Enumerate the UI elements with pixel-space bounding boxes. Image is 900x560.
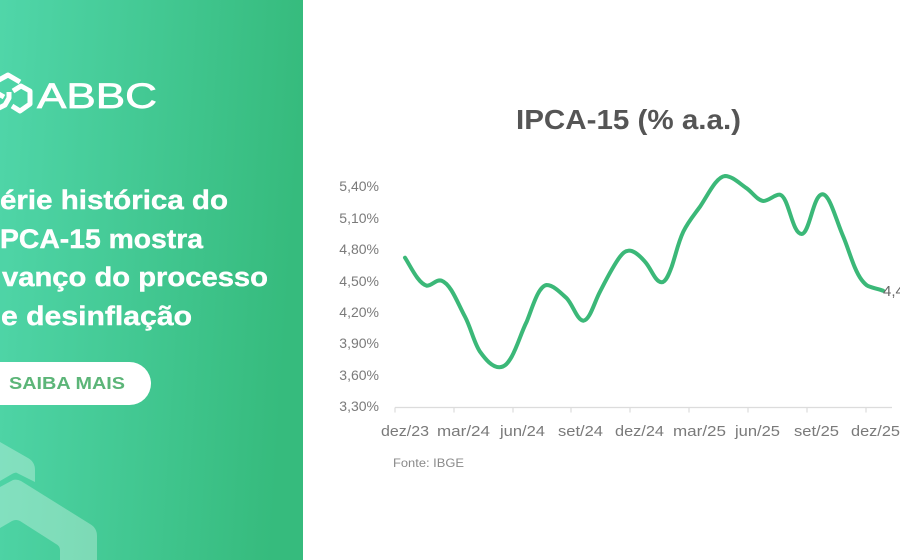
chart title: IPCA-15 (% a.a.)	[516, 104, 741, 135]
headline: vanço do processo	[2, 262, 268, 292]
button: saiba mais	[0, 362, 151, 405]
x axis labels: dez/24	[615, 423, 664, 440]
y axis labels: 3,60%	[339, 367, 379, 383]
headline: e desinflação	[1, 301, 192, 331]
data line: IPCA-15	[405, 176, 883, 367]
x axis labels: mar/25	[673, 423, 726, 440]
x axis labels: jun/25	[734, 423, 780, 440]
source note: Fonte: IBGE	[393, 456, 464, 470]
headline	[0, 185, 268, 331]
panel: green sidebar	[0, 0, 303, 560]
button: saiba mais: SAIBA MAIS	[9, 373, 125, 393]
x axis labels: set/25	[794, 423, 839, 440]
icon: decorative hexagons	[0, 442, 97, 560]
y axis labels: 4,80%	[339, 241, 379, 257]
headline: érie histórica do	[0, 185, 228, 215]
logo: ABBC	[0, 75, 157, 116]
x axis labels: dez/23	[381, 423, 429, 440]
y axis labels: 4,50%	[339, 273, 379, 289]
y axis labels: 3,30%	[339, 398, 379, 414]
x axis	[395, 408, 892, 412]
x axis labels: set/24	[558, 423, 603, 440]
y axis labels: 5,10%	[339, 210, 379, 226]
y axis labels: 3,90%	[339, 335, 379, 351]
y axis labels	[339, 178, 379, 414]
x axis labels: mar/24	[437, 423, 490, 440]
icon: logo mark	[0, 75, 30, 111]
text: ABBC wordmark: ABBC	[37, 77, 157, 116]
headline: PCA-15 mostra	[0, 224, 204, 254]
x axis labels: jun/24	[499, 423, 545, 440]
x axis labels	[381, 423, 900, 440]
x axis labels: dez/25	[851, 423, 900, 440]
y axis labels: 5,40%	[339, 178, 379, 194]
y axis labels: 4,20%	[339, 304, 379, 320]
line chart	[339, 176, 900, 440]
